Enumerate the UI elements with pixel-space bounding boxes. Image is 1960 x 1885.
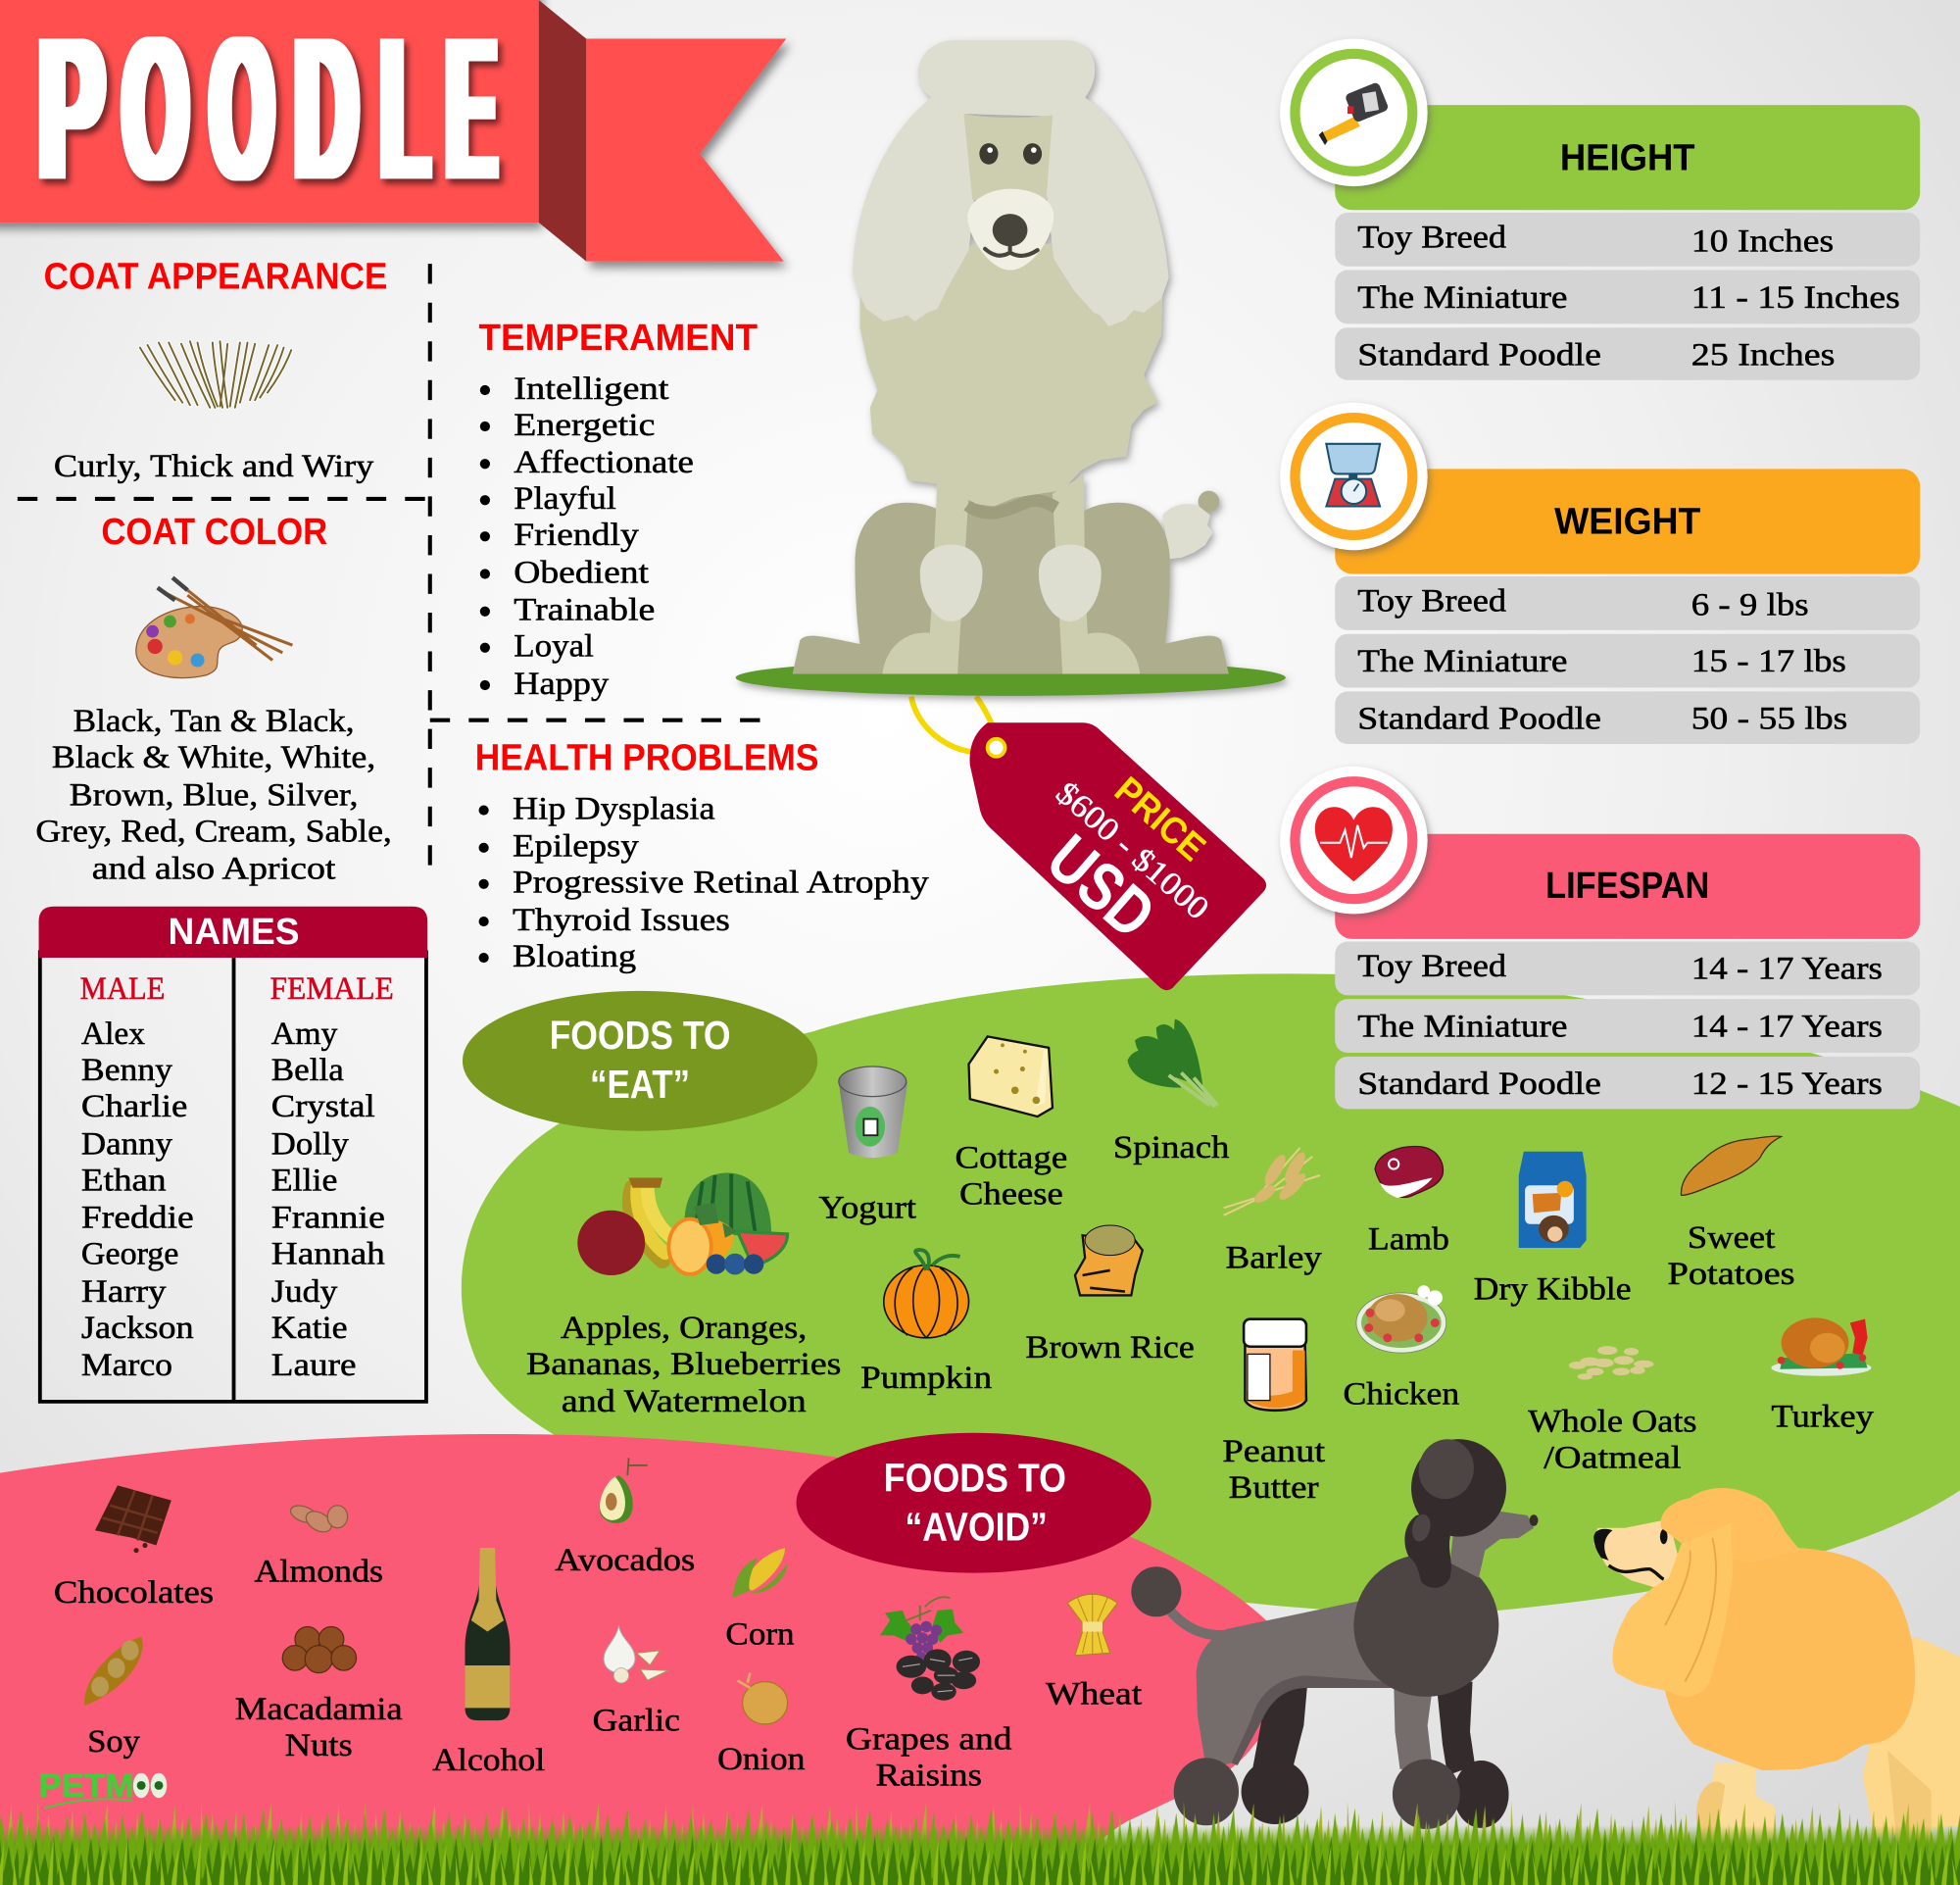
food: cottage cheese: Cottage bbox=[955, 1139, 1067, 1175]
banner fold bbox=[539, 0, 586, 262]
rows bbox=[1335, 576, 1920, 744]
icon: cheese bbox=[969, 1036, 1053, 1116]
icon: jar bbox=[1244, 1319, 1306, 1411]
icon: corn bbox=[732, 1548, 788, 1598]
icon: yogurt cup bbox=[839, 1067, 907, 1158]
icon: macadamia pile bbox=[282, 1626, 357, 1673]
food: dry kibble bbox=[1474, 1152, 1632, 1307]
food: pumpkin bbox=[860, 1250, 993, 1396]
list: Affectionate bbox=[514, 444, 694, 480]
food: soy bbox=[84, 1637, 143, 1760]
icon: wiry hair bbox=[140, 341, 291, 408]
icon: paint palette bbox=[136, 577, 292, 678]
male column: MALE bbox=[80, 970, 165, 1007]
food: peanut butter: Butter bbox=[1229, 1469, 1319, 1506]
rows: Toy Breed bbox=[1357, 583, 1506, 620]
icon: wheat bundle bbox=[1067, 1593, 1117, 1656]
rows: 12 - 15 Years bbox=[1691, 1066, 1883, 1102]
panel: weight bbox=[1280, 403, 1920, 744]
hind legs bbox=[1887, 1751, 1932, 1851]
rows: 50 - 55 lbs bbox=[1691, 701, 1847, 737]
food: fruits: and Watermelon bbox=[562, 1383, 807, 1419]
icon: barley bbox=[1224, 1148, 1320, 1215]
tag body bbox=[970, 722, 1266, 990]
food: chicken: Chicken bbox=[1344, 1375, 1460, 1412]
list: Loyal bbox=[514, 628, 594, 665]
banner main bbox=[0, 0, 539, 223]
food: fruits bbox=[526, 1172, 841, 1419]
food: onion bbox=[717, 1673, 806, 1777]
chest bbox=[1353, 1554, 1498, 1697]
food: corn bbox=[725, 1548, 795, 1652]
male column: Ethan bbox=[81, 1162, 167, 1198]
foods to eat badge bbox=[463, 991, 817, 1131]
rows: 14 - 17 Years bbox=[1691, 1008, 1883, 1044]
description: and also Apricot bbox=[92, 851, 336, 887]
icon: sweet potato bbox=[1681, 1136, 1782, 1195]
female column: Crystal bbox=[271, 1088, 375, 1124]
logo: petmoo: PETM bbox=[39, 1767, 133, 1805]
illustration: sitting poodle bbox=[736, 40, 1286, 696]
food: chocolates: Chocolates bbox=[54, 1574, 214, 1611]
tag text: PRICE bbox=[1106, 769, 1213, 869]
rows: 10 Inches bbox=[1691, 223, 1834, 259]
description: Black, Tan & Black, bbox=[74, 703, 355, 739]
female column: FEMALE bbox=[270, 970, 394, 1007]
tag text bbox=[1004, 741, 1246, 977]
icon: roast chicken bbox=[1356, 1285, 1446, 1353]
food: peanut butter: Peanut bbox=[1222, 1433, 1326, 1469]
list bbox=[479, 790, 929, 974]
food: chocolates bbox=[54, 1485, 214, 1611]
food: sweet potatoes bbox=[1668, 1136, 1795, 1292]
eye bbox=[1660, 1529, 1668, 1544]
male column: Freddie bbox=[81, 1200, 194, 1236]
list: Progressive Retinal Atrophy bbox=[513, 865, 929, 901]
icon: avocado bbox=[600, 1458, 648, 1523]
female column: Frannie bbox=[271, 1200, 385, 1236]
far hind leg bbox=[1252, 1683, 1307, 1769]
list: Friendly bbox=[514, 517, 639, 553]
food: avocados bbox=[555, 1458, 695, 1578]
tail bbox=[1131, 1566, 1238, 1635]
head top knot bbox=[1411, 1439, 1506, 1537]
icon: fruit pile bbox=[577, 1172, 788, 1275]
grass bbox=[0, 1791, 1960, 1885]
near front leg bbox=[1394, 1682, 1433, 1769]
food: almonds bbox=[255, 1503, 383, 1590]
panel: health problems bbox=[475, 737, 929, 974]
nose and mouth bbox=[1593, 1529, 1612, 1561]
icon: tape measure bbox=[1319, 81, 1390, 145]
food: whole oats: /Oatmeal bbox=[1544, 1439, 1682, 1475]
title: P bbox=[39, 0, 104, 223]
description: Grey, Red, Cream, Sable, bbox=[35, 813, 392, 849]
heading: COAT COLOR bbox=[101, 511, 327, 553]
price tag bbox=[970, 722, 1266, 990]
male column: Charlie bbox=[81, 1088, 187, 1124]
title: O bbox=[211, 0, 273, 223]
panel: foods to eat green blob bbox=[462, 973, 1960, 1612]
male column: Jackson bbox=[81, 1310, 194, 1346]
ear bbox=[1404, 1514, 1451, 1588]
food: fruits: Apples, Oranges, bbox=[561, 1310, 807, 1346]
ear bbox=[1612, 1523, 1733, 1697]
icon: champagne bottle bbox=[465, 1548, 510, 1720]
tag text: USD bbox=[1033, 820, 1169, 953]
tag hole bbox=[988, 739, 1005, 757]
heading: HEALTH PROBLEMS bbox=[475, 737, 818, 779]
food: macadamia nuts bbox=[235, 1626, 403, 1763]
female column: Judy bbox=[271, 1273, 338, 1310]
icon: heart bbox=[1315, 807, 1393, 881]
food: yogurt: Yogurt bbox=[818, 1189, 917, 1225]
female column: Dolly bbox=[271, 1125, 349, 1162]
food: soy: Soy bbox=[87, 1723, 140, 1760]
far front leg bbox=[1437, 1682, 1475, 1775]
food: garlic: Garlic bbox=[593, 1702, 680, 1738]
rows: The Miniature bbox=[1357, 643, 1567, 679]
panel: coat color bbox=[35, 511, 392, 887]
list: Thyroid Issues bbox=[513, 902, 730, 938]
list: Energetic bbox=[514, 407, 655, 443]
mane bbox=[1662, 1546, 1915, 1770]
title banner bbox=[0, 0, 786, 262]
food: sweet potatoes: Sweet bbox=[1688, 1219, 1776, 1256]
food: corn: Corn bbox=[725, 1615, 795, 1652]
heading: COAT APPEARANCE bbox=[44, 256, 387, 298]
rows bbox=[1335, 213, 1920, 380]
rows: 14 - 17 Years bbox=[1691, 951, 1883, 987]
icon: lamb cut bbox=[1375, 1147, 1443, 1198]
food: pumpkin: Pumpkin bbox=[860, 1360, 993, 1396]
body bbox=[1863, 1633, 1960, 1838]
front paws bbox=[920, 545, 1102, 621]
table frame bbox=[40, 950, 426, 1402]
food: garlic bbox=[593, 1625, 680, 1738]
table header bbox=[39, 907, 427, 958]
food: lamb bbox=[1368, 1147, 1449, 1257]
food: sweet potatoes: Potatoes bbox=[1668, 1256, 1795, 1292]
dashed dividers bbox=[18, 264, 762, 868]
icon: almonds bbox=[288, 1503, 348, 1536]
food: wheat: Wheat bbox=[1046, 1676, 1143, 1712]
header bar bbox=[1335, 469, 1920, 573]
female column: Katie bbox=[271, 1310, 348, 1346]
list: Hip Dysplasia bbox=[513, 790, 715, 826]
tag text: $600 - $1000 bbox=[1049, 774, 1216, 927]
description: Curly, Thick and Wiry bbox=[54, 448, 374, 484]
male column: Danny bbox=[81, 1125, 172, 1162]
food: avocados: Avocados bbox=[555, 1542, 695, 1578]
female column: Amy bbox=[271, 1016, 338, 1052]
rows: 25 Inches bbox=[1691, 336, 1835, 372]
top knot bbox=[1661, 1488, 1800, 1563]
rows: 11 - 15 Inches bbox=[1691, 279, 1900, 316]
front legs bbox=[927, 475, 1090, 674]
food: brown rice: Brown Rice bbox=[1026, 1329, 1195, 1365]
male column bbox=[80, 970, 194, 1383]
food: spinach bbox=[1113, 1019, 1230, 1166]
title bbox=[39, 0, 496, 223]
icon: oats bbox=[1569, 1346, 1654, 1380]
list: Bloating bbox=[513, 938, 636, 974]
foods to avoid badge: “AVOID” bbox=[905, 1504, 1048, 1549]
chest fur bbox=[860, 244, 1162, 507]
male column: George bbox=[81, 1236, 178, 1272]
food: chicken bbox=[1344, 1285, 1460, 1412]
icon: soy pod bbox=[84, 1637, 143, 1706]
male column: Benny bbox=[81, 1052, 172, 1088]
header label: WEIGHT bbox=[1554, 501, 1700, 543]
banner tail bbox=[586, 39, 786, 262]
rows: Toy Breed bbox=[1357, 948, 1506, 984]
icon: pumpkin bbox=[884, 1250, 969, 1338]
list bbox=[480, 371, 694, 702]
food: grapes and raisins: Grapes and bbox=[846, 1720, 1012, 1757]
forelegs bbox=[1696, 1762, 1776, 1851]
food: grapes and raisins: Raisins bbox=[875, 1757, 982, 1793]
names heading: NAMES bbox=[169, 911, 299, 953]
food: onion: Onion bbox=[717, 1741, 806, 1777]
list: Playful bbox=[514, 480, 616, 517]
food: cottage cheese bbox=[955, 1036, 1067, 1212]
icon: kitchen scale bbox=[1326, 444, 1380, 507]
female column: Ellie bbox=[271, 1162, 337, 1198]
male column: Alex bbox=[81, 1016, 145, 1052]
nose bbox=[1530, 1514, 1539, 1526]
male column: Marco bbox=[81, 1347, 172, 1383]
header bar bbox=[1335, 105, 1920, 210]
badge bbox=[1280, 403, 1428, 550]
panel: names table bbox=[39, 907, 427, 1402]
food: dry kibble: Dry Kibble bbox=[1474, 1270, 1632, 1307]
rows: The Miniature bbox=[1357, 1008, 1567, 1044]
food: almonds: Almonds bbox=[255, 1554, 383, 1590]
food: turkey bbox=[1771, 1317, 1874, 1434]
illustration: dark poodle bbox=[1131, 1434, 1539, 1829]
title banner: E bbox=[447, 0, 496, 223]
rows: Standard Poodle bbox=[1357, 1066, 1601, 1102]
heading: TEMPERAMENT bbox=[479, 317, 758, 359]
food: barley: Barley bbox=[1226, 1239, 1322, 1275]
badge bbox=[1280, 767, 1428, 914]
food: whole oats: Whole Oats bbox=[1528, 1403, 1697, 1439]
description bbox=[35, 703, 392, 887]
food: whole oats bbox=[1528, 1346, 1697, 1475]
food: macadamia nuts: Macadamia bbox=[235, 1691, 403, 1727]
rows: The Miniature bbox=[1357, 279, 1567, 316]
header label: LIFESPAN bbox=[1545, 865, 1709, 907]
food: turkey: Turkey bbox=[1771, 1398, 1874, 1434]
belly bbox=[957, 493, 1063, 674]
description: Brown, Blue, Silver, bbox=[70, 776, 358, 813]
icon: grapes and raisins bbox=[880, 1597, 980, 1701]
icon: kibble bag bbox=[1519, 1152, 1587, 1248]
female column: Laure bbox=[271, 1347, 357, 1383]
rows: 6 - 9 lbs bbox=[1691, 587, 1809, 623]
muzzle and neck bbox=[1450, 1507, 1534, 1578]
body shade bbox=[1231, 1675, 1392, 1765]
paws bbox=[1174, 1758, 1509, 1829]
header label: HEIGHT bbox=[1560, 136, 1695, 178]
icon: garlic bbox=[604, 1625, 668, 1683]
title: L bbox=[381, 0, 428, 223]
male column: Harry bbox=[81, 1273, 167, 1310]
icon: onion bbox=[738, 1673, 788, 1724]
female column bbox=[270, 970, 394, 1383]
list: Obedient bbox=[514, 554, 650, 590]
food: fruits: Bananas, Blueberries bbox=[526, 1346, 841, 1382]
muzzle bbox=[1593, 1519, 1682, 1588]
panel: height bbox=[1280, 39, 1920, 380]
foods to avoid badge bbox=[796, 1433, 1152, 1573]
panel: coat appearance bbox=[44, 256, 387, 484]
rows bbox=[1335, 941, 1920, 1109]
foods to avoid badge: FOODS TO bbox=[884, 1456, 1066, 1501]
food: lamb: Lamb bbox=[1368, 1220, 1449, 1257]
list: Happy bbox=[514, 666, 610, 702]
icon: chocolate bar bbox=[95, 1485, 172, 1553]
food: grapes and raisins bbox=[846, 1597, 1012, 1793]
rows: Standard Poodle bbox=[1357, 336, 1601, 372]
title: O bbox=[123, 0, 188, 223]
food: brown rice bbox=[1026, 1225, 1195, 1365]
badge bbox=[1280, 39, 1428, 186]
list: Intelligent bbox=[514, 371, 669, 407]
list: Epilepsy bbox=[513, 828, 639, 865]
panel: foods to avoid pink blob bbox=[0, 1434, 1285, 1885]
foods to eat badge: “EAT” bbox=[590, 1062, 690, 1107]
haunches bbox=[855, 503, 1170, 674]
food: peanut butter bbox=[1222, 1319, 1326, 1506]
food: cottage cheese: Cheese bbox=[959, 1175, 1063, 1212]
head and ears bbox=[853, 40, 1169, 326]
logo: petmoo bbox=[39, 1767, 167, 1808]
rows: Standard Poodle bbox=[1357, 701, 1601, 737]
ground ellipse bbox=[736, 660, 1286, 696]
description: Black & White, White, bbox=[52, 739, 375, 775]
illustration: golden poodle bbox=[1593, 1488, 1960, 1851]
female column: Hannah bbox=[271, 1236, 385, 1272]
header bar bbox=[1335, 834, 1920, 939]
food: macadamia nuts: Nuts bbox=[285, 1727, 353, 1763]
icon: rice sack bbox=[1075, 1225, 1143, 1295]
rows: 15 - 17 lbs bbox=[1691, 643, 1846, 679]
body bbox=[1197, 1601, 1400, 1769]
panel: temperament bbox=[479, 317, 758, 702]
title: D bbox=[295, 0, 358, 223]
food: spinach: Spinach bbox=[1113, 1129, 1230, 1166]
face bbox=[963, 114, 1054, 271]
price tag string bbox=[911, 696, 997, 752]
panel: lifespan bbox=[1280, 767, 1920, 1109]
chest band bbox=[967, 501, 1056, 513]
icon: spinach bbox=[1128, 1019, 1217, 1107]
icon: roast turkey bbox=[1771, 1317, 1871, 1376]
rows: Toy Breed bbox=[1357, 220, 1506, 256]
food: alcohol: Alcohol bbox=[432, 1742, 545, 1778]
foods to eat badge: FOODS TO bbox=[550, 1013, 731, 1058]
food: alcohol bbox=[432, 1548, 545, 1778]
tail bbox=[1162, 491, 1219, 559]
food: yogurt bbox=[818, 1067, 917, 1225]
list: Trainable bbox=[514, 592, 655, 628]
female column: Bella bbox=[271, 1052, 344, 1088]
food: barley bbox=[1224, 1148, 1322, 1275]
food: wheat bbox=[1046, 1593, 1143, 1712]
